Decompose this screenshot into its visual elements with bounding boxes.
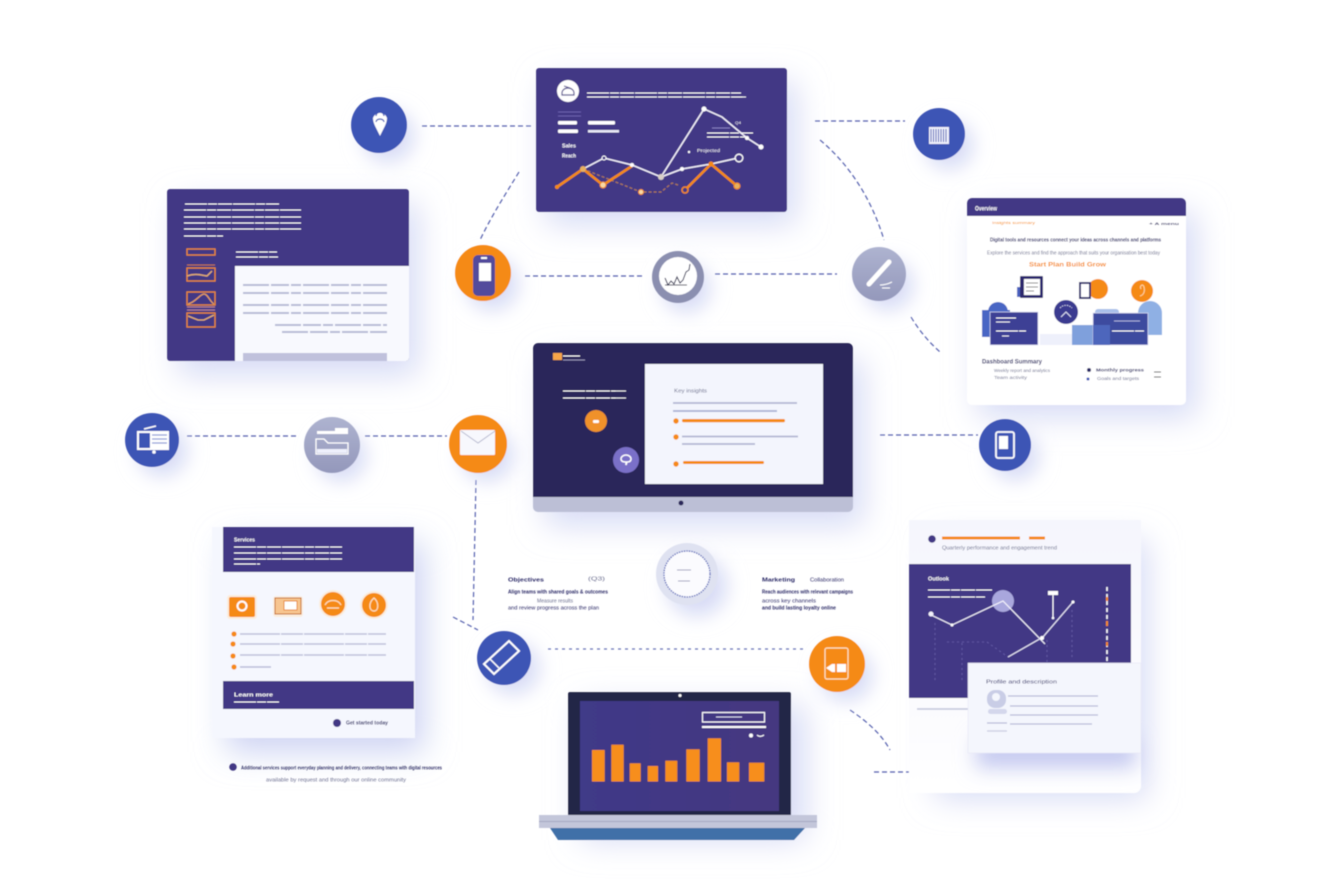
text: page title: Overview (975, 207, 997, 213)
header band: Services (234, 537, 255, 543)
panel: bottom-right analytics report (909, 520, 1147, 798)
node: folder icon (304, 417, 366, 481)
icon: avatar (987, 690, 1007, 714)
legend: pill labels: Sales (562, 143, 576, 149)
chart: line chart with orange and white series (555, 106, 764, 194)
panel: top line chart dashboard (536, 68, 796, 224)
panel: monitor content sheet: Key insights (674, 388, 707, 394)
text: page intro: + A menu (1149, 221, 1180, 226)
text: chart notes: Q4 (735, 120, 742, 125)
label: sheet footer (333, 719, 388, 727)
header band (223, 527, 414, 572)
icon: central medal (656, 543, 727, 616)
text: chart notes (688, 120, 753, 153)
icon row (227, 590, 388, 619)
chart: purple line chart (909, 564, 1131, 698)
text: center right block: across key channels (762, 598, 817, 604)
text: footnote under sheet: Additional services support everyday planning and delivery, connecting teams with digital resources (241, 765, 442, 771)
text: page intro: Insights summary (992, 220, 1035, 225)
icon: logo and label (553, 353, 585, 360)
node: orange phone icon (455, 245, 518, 310)
text: report intro lines (184, 204, 301, 257)
node: mail icon (449, 415, 513, 481)
text: center right block (762, 577, 853, 611)
text: center left block: Objectives (508, 577, 544, 583)
text: monitor side copy (563, 391, 626, 398)
laptop base (539, 815, 817, 840)
node: pen icon (852, 247, 913, 310)
text: center left block: Measure results (537, 598, 573, 604)
text: page footer details: Goals and targets (1097, 376, 1140, 381)
laptop body (568, 692, 791, 816)
node: tablet icon (979, 419, 1039, 480)
connector: dashed lines between nodes (187, 121, 978, 772)
chart: purple line chart: Outlook (928, 576, 949, 582)
icon: purple cloud (613, 447, 639, 473)
chart legend box (702, 712, 766, 738)
node: orange document icon (809, 636, 872, 701)
text: center left block: Align teams with shared goals & outcomes (508, 589, 608, 595)
icon: orange chat bubble (585, 410, 607, 432)
text: center left block: (Q3) (588, 576, 605, 582)
report heading (928, 535, 1057, 551)
laptop screen (580, 701, 779, 811)
node: chart badge icon (652, 251, 710, 312)
text: center right block: and build lasting loyalty online (762, 605, 836, 611)
text: page footer details: Team activity (994, 375, 1028, 380)
icon: dashboard badge (557, 80, 579, 102)
card: overlay profile card: Profile and description (986, 679, 1057, 685)
node: location pin icon (351, 97, 414, 162)
report heading: Quarterly performance and engagement trend (942, 545, 1057, 551)
panel: central desktop monitor (533, 343, 863, 525)
illustration: devices and people (982, 276, 1162, 345)
bullet list (230, 631, 386, 670)
panel: left text report (167, 189, 418, 375)
text: center left block: and review progress across the plan (508, 605, 599, 611)
node: barcode document icon (913, 108, 973, 169)
text: page footer details (982, 360, 1161, 381)
text: center right block: Collaboration (810, 577, 844, 583)
footer band: Learn more (234, 692, 273, 698)
icon: orange mini charts (187, 249, 215, 327)
text: page intro: Start Plan Build Grow (1029, 263, 1106, 269)
panel: bottom-left services sheet (212, 527, 424, 752)
text: page footer details: Monthly progress (1096, 367, 1144, 373)
text: footnote under sheet: available by request and through our online community (266, 777, 407, 783)
text: page footer details: Dashboard Summary (982, 360, 1043, 366)
panel: laptop bar chart (539, 692, 817, 840)
text: page intro (987, 220, 1180, 269)
node: rectangle tag icon (477, 631, 539, 694)
node: monitor icon (125, 413, 187, 476)
label: sheet footer: Get started today (346, 720, 388, 726)
text: page footer details: Weekly report and analytics (994, 368, 1051, 373)
text: center right block: Marketing (762, 577, 795, 583)
text: chart notes: Projected (697, 148, 721, 153)
header bar (967, 198, 1186, 216)
text: top panel header (587, 93, 746, 97)
text block: white report body (235, 266, 409, 361)
text: center left block (508, 576, 608, 611)
footer band (223, 681, 414, 709)
panel: monitor content sheet (645, 364, 823, 484)
monitor chin (533, 480, 853, 512)
text: footnote under sheet (229, 763, 442, 783)
chart: orange bars (592, 738, 764, 782)
legend: pill labels: Reach (562, 153, 576, 159)
monitor screen (533, 343, 853, 497)
text: center right block: Reach audiences with relevant campaigns (762, 589, 853, 595)
text: page intro: Explore the services and find the approach that suits your organisation best today (987, 250, 1160, 256)
legend: pill labels (558, 112, 619, 159)
panel: right web page mockup (967, 198, 1196, 417)
card: overlay profile card (968, 663, 1141, 768)
text: page intro: Digital tools and resources connect your ideas across channels and platforms (990, 237, 1161, 243)
